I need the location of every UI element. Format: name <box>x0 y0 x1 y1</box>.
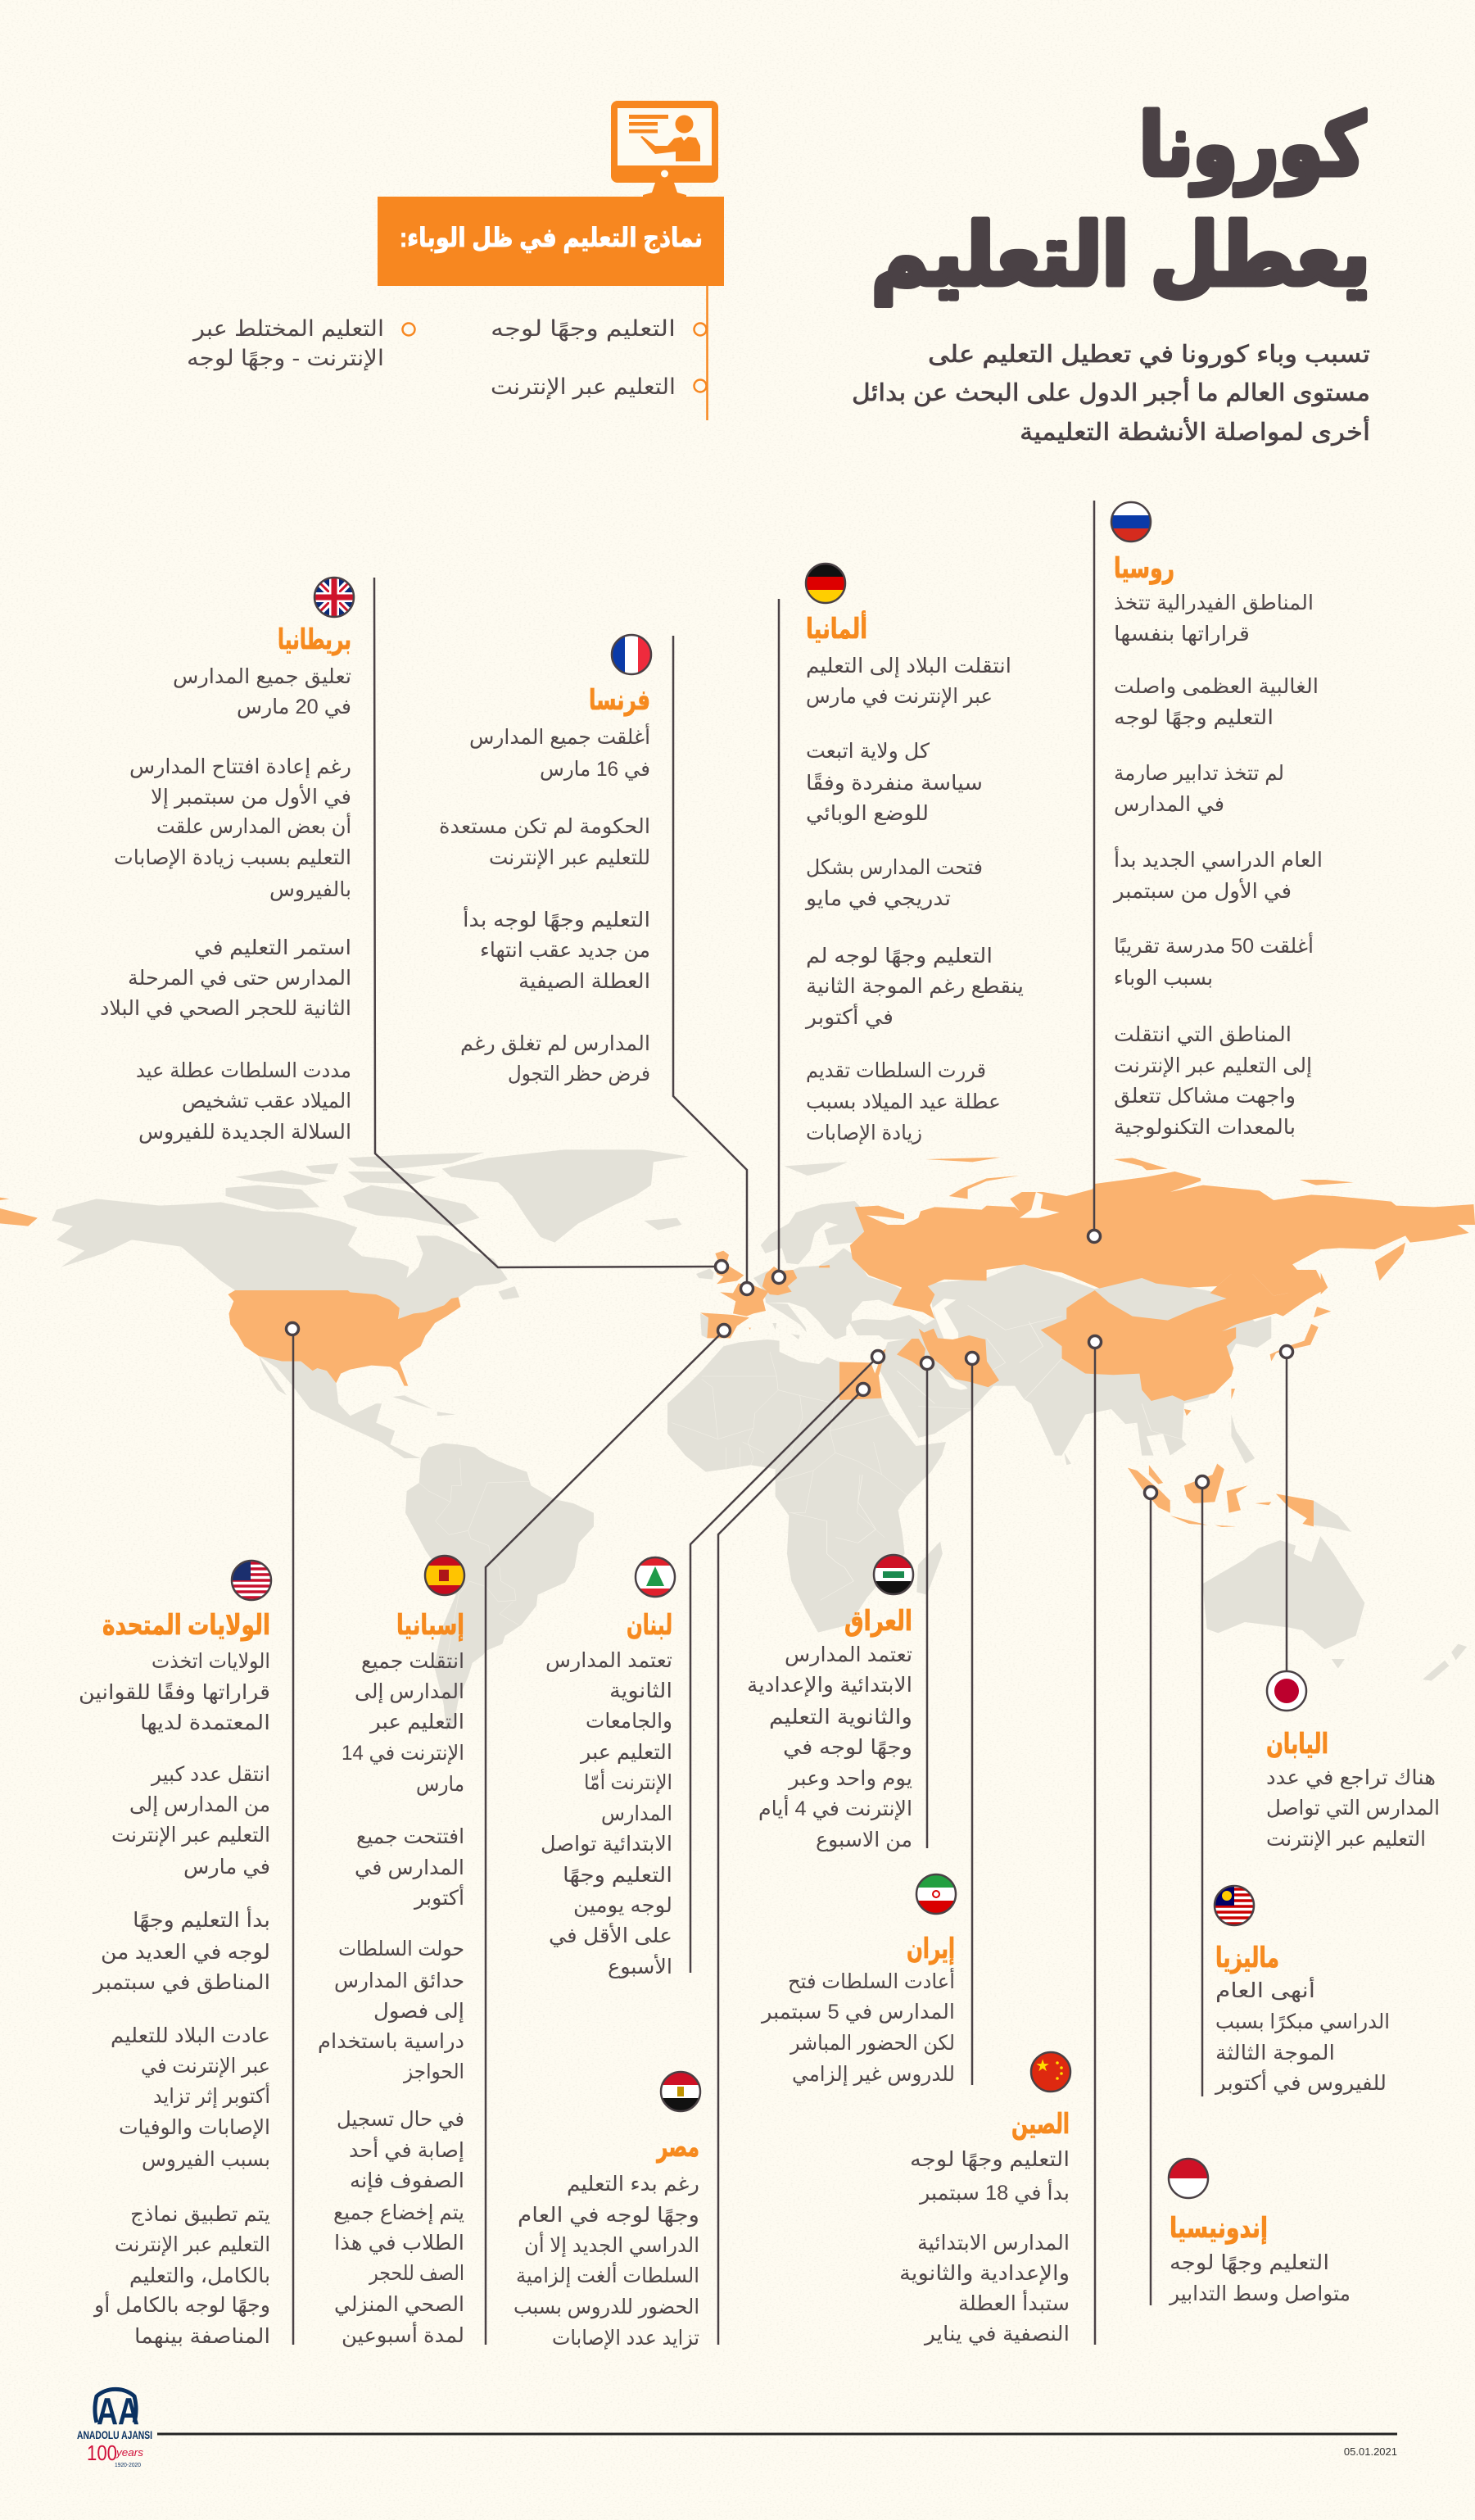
body: Germany: كل ولاية اتبعت <box>806 740 930 764</box>
leader: France <box>673 636 753 1294</box>
body: United States: بالكامل، والتعليم <box>129 2264 270 2288</box>
legend: teaching models <box>187 286 708 420</box>
body: Iran: لكن الحضور المباشر <box>789 2032 955 2055</box>
body: Spain: انتقلت جميع <box>361 1650 464 1674</box>
body: Indonesia: متواصل وسط التدابير <box>1168 2282 1351 2306</box>
leader: Iran <box>966 1352 978 2085</box>
body: Japan: التعليم عبر الإنترنت <box>1266 1828 1426 1851</box>
body: Egypt: وجهًا لوجه في العام <box>518 2204 699 2228</box>
legend item: hybrid: التعليم المختلط عبر <box>192 316 384 342</box>
legend item: hybrid <box>187 316 414 371</box>
body: United States: قراراتها وفقًا للقوانين <box>79 1681 270 1705</box>
body: United Kingdom <box>100 665 351 1144</box>
body: Russia: الغالبية العظمى واصلت <box>1114 675 1319 699</box>
flag: United Kingdom <box>314 578 354 617</box>
body: Spain: في حال تسجيل <box>337 2108 464 2131</box>
panel: China <box>899 2052 1070 2346</box>
body: United Kingdom: في الأول من سبتمبر إلا <box>151 783 351 809</box>
body: Russia: في المدارس <box>1114 793 1224 816</box>
body: Spain: الإنترنت في 14 <box>342 1742 464 1765</box>
body: China: النصفية في يناير <box>923 2323 1070 2346</box>
world map <box>0 1149 1475 1731</box>
body: United States: الإصابات والوفيات <box>119 2116 270 2140</box>
flag: Spain <box>425 1556 464 1595</box>
body: Germany <box>804 655 1024 1144</box>
body: United Kingdom: السلالة الجديدة للفيروس <box>138 1121 351 1144</box>
heading: Spain: إسبانيا <box>396 1610 464 1642</box>
leader: Russia <box>1088 501 1101 1242</box>
flag: Indonesia <box>1169 2159 1208 2198</box>
footer rule <box>157 2433 1397 2435</box>
flag: France <box>612 635 651 674</box>
body: Lebanon: على الأقل في <box>549 1922 672 1947</box>
body: Spain: المدارس في <box>355 1856 464 1879</box>
body: China: والإعدادية والثانوية <box>899 2262 1070 2286</box>
panel: Germany <box>804 564 1024 1144</box>
body: Malaysia <box>1214 1976 1390 2096</box>
body: United Kingdom: تعليق جميع المدارس <box>173 665 351 689</box>
body: Lebanon: التعليم عبر <box>579 1741 672 1765</box>
body: France: من جديد عقب انتهاء <box>480 939 650 963</box>
body: Japan <box>1266 1766 1440 1851</box>
body: United Kingdom: المدارس حتى في المرحلة <box>128 967 351 990</box>
leader lines and location pins <box>287 501 1292 2345</box>
intro paragraph: مستوى العالم ما أجبر الدول على البحث عن بدائل <box>852 376 1370 407</box>
heading: United States: الولايات المتحدة <box>102 1610 270 1642</box>
flag: United States <box>232 1561 271 1600</box>
body: Iran: أعادت السلطات فتح <box>788 1967 955 1994</box>
body: Malaysia: للفيروس في أكتوبر <box>1214 2069 1387 2096</box>
date: 05.01.2021 <box>1344 2445 1397 2458</box>
body: Egypt: السلطات ألغت إلزامية <box>516 2261 699 2288</box>
body: Malaysia: الدراسي مبكرًا بسبب <box>1215 2010 1390 2033</box>
intro paragraph: تسبب وباء كورونا في تعطيل التعليم على <box>928 342 1370 369</box>
intro paragraph <box>852 342 1370 446</box>
body: Germany: للوضع الوبائي <box>806 802 929 826</box>
logo: Anadolu Agency <box>77 2389 152 2468</box>
panel: teaching models heading: نماذج التعليم في ظل الوباء: <box>400 223 703 253</box>
body: United Kingdom: في 20 مارس <box>237 696 351 718</box>
legend item: face to face: التعليم وجهًا لوجه <box>491 316 676 342</box>
body: Iraq: يوم واحد وعبر <box>787 1767 912 1791</box>
panel: Malaysia <box>1214 1886 1390 2096</box>
flag: Germany <box>806 564 845 603</box>
body: Lebanon: المدارس <box>601 1802 672 1825</box>
body: Malaysia: الموجة الثالثة <box>1215 2042 1335 2064</box>
body: Germany: في أكتوبر <box>804 1003 894 1029</box>
heading: France: فرنسا <box>589 685 650 717</box>
heading: Egypt: مصر <box>656 2132 699 2164</box>
body: Russia: التعليم وجهًا لوجه <box>1114 706 1274 730</box>
body: Egypt <box>514 2173 699 2350</box>
heading: Iran: إيران <box>907 1933 955 1965</box>
body: Egypt: الدراسي الجديد إلا أن <box>524 2231 699 2258</box>
flag: Lebanon <box>636 1557 675 1597</box>
leader: United States <box>287 1322 298 2345</box>
body: Japan: هناك تراجع في عدد <box>1266 1766 1436 1790</box>
logo: Anadolu Agency: AA <box>97 2390 139 2432</box>
body: Germany: عبر الإنترنت في مارس <box>806 685 993 708</box>
body: Egypt: الحضور للدروس بسبب <box>514 2296 699 2319</box>
logo: Anadolu Agency: years <box>115 2446 144 2459</box>
heading: Lebanon: لبنان <box>627 1610 672 1641</box>
body: United Kingdom: استمر التعليم في <box>194 936 351 960</box>
body: Spain: يتم إخضاع جميع <box>333 2201 464 2225</box>
body: Lebanon: الإنترنت أمّا <box>584 1768 672 1794</box>
body: Lebanon: الأسبوع <box>608 1953 672 1978</box>
body: United States: المعتمدة لديها <box>140 1711 270 1735</box>
body: United States: بسبب الفيروس <box>142 2148 270 2172</box>
flag: China: ★ <box>1035 2057 1050 2075</box>
panel: Spain <box>318 1556 464 2347</box>
body: Spain: إصابة في أحد <box>349 2136 464 2163</box>
body: Malaysia: أنهى العام <box>1215 1976 1315 2003</box>
body: United States: لوجه في العديد من <box>101 1941 270 1964</box>
leader: Spain <box>486 1324 731 2345</box>
body: United Kingdom: بالفيروس <box>269 878 351 902</box>
body: United States: التعليم عبر الإنترنت <box>111 1824 270 1847</box>
body: Lebanon <box>541 1649 672 1978</box>
title: يعطل التعليم <box>871 208 1370 306</box>
body: Germany: عطلة عيد الميلاد بسبب <box>806 1090 1001 1113</box>
body: China: ستبدأ العطلة <box>958 2289 1070 2315</box>
body: Spain: الصف للحجر <box>368 2262 464 2285</box>
body: United States: يتم تطبيق نماذج <box>130 2203 270 2227</box>
body: United States <box>79 1650 270 2349</box>
body: Spain: دراسية باستخدام <box>318 2030 464 2053</box>
body: United States: أكتوبر إثر تزايد <box>153 2082 270 2109</box>
body: Spain: الحواجز <box>402 2060 464 2083</box>
leader: Lebanon <box>690 1350 885 1973</box>
body: Iraq: الإنترنت في 4 أيام <box>758 1794 912 1820</box>
body: Russia: لم تتخذ تدابير صارمة <box>1114 762 1284 786</box>
body: United Kingdom: الثانية للحجر الصحي في البلاد <box>100 997 351 1020</box>
logo: Anadolu Agency: 1920-2020 <box>115 2463 141 2468</box>
body: Egypt: رغم بدء التعليم <box>567 2173 699 2196</box>
body: France: التعليم وجهًا لوجه بدأ <box>463 905 650 932</box>
leader: Egypt <box>718 1383 870 2345</box>
heading: China: الصين <box>1011 2109 1070 2141</box>
body: Spain: مارس <box>416 1773 464 1796</box>
body: France: المدارس لم تغلق رغم <box>460 1032 650 1056</box>
body: France: للتعليم عبر الإنترنت <box>489 846 650 870</box>
body: Russia: بسبب الوباء <box>1114 967 1213 990</box>
body: China <box>899 2148 1070 2346</box>
body: United Kingdom: رغم إعادة افتتاح المدارس <box>129 755 351 779</box>
logo: Anadolu Agency: 100 <box>87 2441 117 2465</box>
body: Russia: قراراتها بنفسها <box>1114 623 1250 646</box>
body: Iran: للدروس غير إلزامي <box>792 2063 955 2087</box>
icon: teacher on monitor <box>611 101 718 197</box>
body: Germany: التعليم وجهًا لوجه لم <box>806 945 993 968</box>
body: Iran: المدارس في 5 سبتمبر <box>760 2001 955 2024</box>
leader: Germany <box>773 599 785 1283</box>
leader: Malaysia <box>1196 1476 1209 2096</box>
body: Germany: قررت السلطات تقديم <box>806 1059 986 1083</box>
body: France: أغلقت جميع المدارس <box>469 723 650 750</box>
body: United States: عادت البلاد للتعليم <box>111 2024 270 2048</box>
body: Indonesia: التعليم وجهًا لوجه <box>1170 2251 1329 2275</box>
body: United Kingdom: مددت السلطات عطلة عيد <box>136 1059 351 1082</box>
body: Iraq: من الاسبوع <box>816 1829 912 1851</box>
legend item: hybrid: الإنترنت - وجهًا لوجه <box>187 346 384 371</box>
panel: United Kingdom <box>100 578 354 1144</box>
body: Spain: حولت السلطات <box>338 1938 464 1960</box>
body: United States: من المدارس إلى <box>129 1793 270 1817</box>
body: Lebanon: الابتدائية تواصل <box>541 1833 672 1856</box>
body: Spain: المدارس إلى <box>355 1680 464 1704</box>
flag: Iraq <box>874 1555 913 1594</box>
body: France: العطلة الصيفية <box>518 970 650 993</box>
body: France: الحكومة لم تكن مستعدة <box>439 815 650 839</box>
panel: Iran <box>760 1874 956 2087</box>
leader: Iraq <box>921 1357 934 1848</box>
body: Russia: العام الدراسي الجديد بدأ <box>1114 845 1323 872</box>
body: Indonesia <box>1168 2251 1351 2306</box>
body: Russia: المناطق التي انتقلت <box>1114 1023 1292 1046</box>
body: Lebanon: لوجه يومين <box>573 1894 672 1917</box>
body: Iraq: تعتمد المدارس <box>785 1643 912 1666</box>
body: Russia: في الأول من سبتمبر <box>1112 877 1292 904</box>
body: Spain: لمدة أسبوعين <box>342 2321 464 2347</box>
body: Spain: الصفوف فإنه <box>350 2169 464 2193</box>
body: Russia: بالمعدات التكنولوجية <box>1114 1116 1296 1139</box>
body: United Kingdom: التعليم بسبب زيادة الإصابات <box>114 846 351 870</box>
body: Spain: حدائق المدارس <box>334 1969 464 1992</box>
body: Germany: تدريجي في مايو <box>804 887 951 910</box>
body: United Kingdom: أن بعض المدارس علقت <box>156 812 351 838</box>
body: United States: الولايات اتخذت <box>152 1650 270 1673</box>
flag: Malaysia <box>1215 1886 1254 1925</box>
body: Lebanon: تعتمد المدارس <box>545 1649 672 1672</box>
leader: Japan <box>1281 1345 1292 1671</box>
body: Lebanon: الثانوية <box>609 1679 672 1702</box>
body: United States: في مارس <box>183 1856 270 1879</box>
body: Spain <box>318 1650 464 2347</box>
leader: China <box>1089 1335 1101 2345</box>
body: Russia: المناطق الفيدرالية تتخذ <box>1114 591 1314 614</box>
title: كورونا <box>1139 98 1365 196</box>
legend item: online: التعليم عبر الإنترنت <box>491 374 676 400</box>
intro paragraph: أخرى لمواصلة الأنشطة التعليمية <box>1020 415 1370 446</box>
body: United States: المناصفة بينهما <box>134 2325 270 2349</box>
panel: United States <box>79 1561 271 2349</box>
body: Egypt: تزايد عدد الإصابات <box>552 2327 699 2350</box>
heading: Japan: اليابان <box>1266 1729 1328 1760</box>
body: Spain: افتتحت جميع <box>356 1825 464 1849</box>
heading: Malaysia: ماليزيا <box>1215 1942 1279 1974</box>
panel: Japan <box>1266 1671 1440 1851</box>
panel: Indonesia <box>1168 2159 1351 2306</box>
body: China: المدارس الابتدائية <box>917 2232 1070 2255</box>
panel: Russia <box>1111 502 1323 1139</box>
body: United States: عبر الإنترنت في <box>141 2055 270 2078</box>
flag: China <box>1031 2052 1070 2092</box>
body: Russia: إلى التعليم عبر الإنترنت <box>1114 1054 1312 1078</box>
body: Russia: واجهت مشاكل تتعلق <box>1114 1085 1296 1108</box>
heading: Russia: روسيا <box>1114 553 1174 585</box>
flag: Japan <box>1267 1671 1306 1711</box>
body: Spain: أكتوبر <box>413 1883 464 1910</box>
body: Iraq: الابتدائية والإعدادية <box>747 1674 912 1697</box>
body: Russia <box>1112 591 1323 1139</box>
body: France: فرض حظر التجول <box>508 1063 650 1086</box>
flag: Russia <box>1111 502 1151 542</box>
body: Iraq: والثانوية التعليم <box>769 1706 912 1729</box>
body: Spain: التعليم عبر <box>369 1711 464 1734</box>
body: Germany: فتحت المدارس بشكل <box>806 856 983 879</box>
body: United States: التعليم عبر الإنترنت <box>115 2233 270 2257</box>
body: Spain: إلى فصول <box>373 2000 464 2024</box>
logo: Anadolu Agency: ANADOLU AJANSI <box>77 2428 152 2441</box>
body: Germany: زيادة الإصابات <box>806 1122 922 1144</box>
heading: Germany: ألمانيا <box>806 610 867 645</box>
panel: France <box>439 635 651 1086</box>
title <box>871 98 1370 306</box>
heading: United Kingdom: بريطانيا <box>278 624 351 656</box>
panel: Lebanon <box>541 1557 675 1978</box>
heading: Indonesia: إندونيسيا <box>1170 2213 1268 2245</box>
body: Iraq: وجهًا لوجه في <box>783 1736 912 1760</box>
leader: United Kingdom <box>374 578 727 1273</box>
body: France <box>439 723 650 1086</box>
body: France: في 16 مارس <box>540 758 650 781</box>
leader: Indonesia <box>1145 1486 1156 2305</box>
body: China: بدأ في 18 سبتمبر <box>918 2178 1070 2205</box>
flag: Egypt <box>661 2072 700 2111</box>
body: Spain: الصحي المنزلي <box>334 2293 464 2316</box>
body: Russia: أغلقت 50 مدرسة تقريبًا <box>1114 931 1314 958</box>
panel: Iraq <box>747 1555 913 1851</box>
heading: Iraq: العراق <box>844 1606 912 1638</box>
flag: Iran <box>916 1874 956 1914</box>
panel: Egypt <box>514 2072 700 2350</box>
body: Germany: سياسة منفردة وفقًا <box>806 772 983 795</box>
body: United States: انتقل عدد كبير <box>150 1763 270 1786</box>
body: United States: المناطق في سبتمبر <box>92 1971 270 1994</box>
body: Iran <box>760 1967 955 2087</box>
panel: teaching models heading <box>378 197 724 286</box>
body: Japan: المدارس التي تواصل <box>1266 1797 1440 1820</box>
body: Germany: ينقطع رغم الموجة الثانية <box>806 975 1024 999</box>
body: Iraq <box>747 1643 912 1851</box>
body: Lebanon: التعليم وجهًا <box>563 1864 672 1888</box>
body: China: التعليم وجهًا لوجه <box>910 2148 1070 2172</box>
body: United States: وجهًا لوجه بالكامل أو <box>93 2291 270 2318</box>
body: Germany: انتقلت البلاد إلى التعليم <box>806 655 1011 678</box>
body: United States: بدأ التعليم وجهًا <box>133 1906 270 1933</box>
body: United Kingdom: الميلاد عقب تشخيص <box>182 1090 351 1113</box>
body: Lebanon: والجامعات <box>586 1710 672 1734</box>
body: Spain: الطلاب في هذا <box>334 2232 464 2255</box>
